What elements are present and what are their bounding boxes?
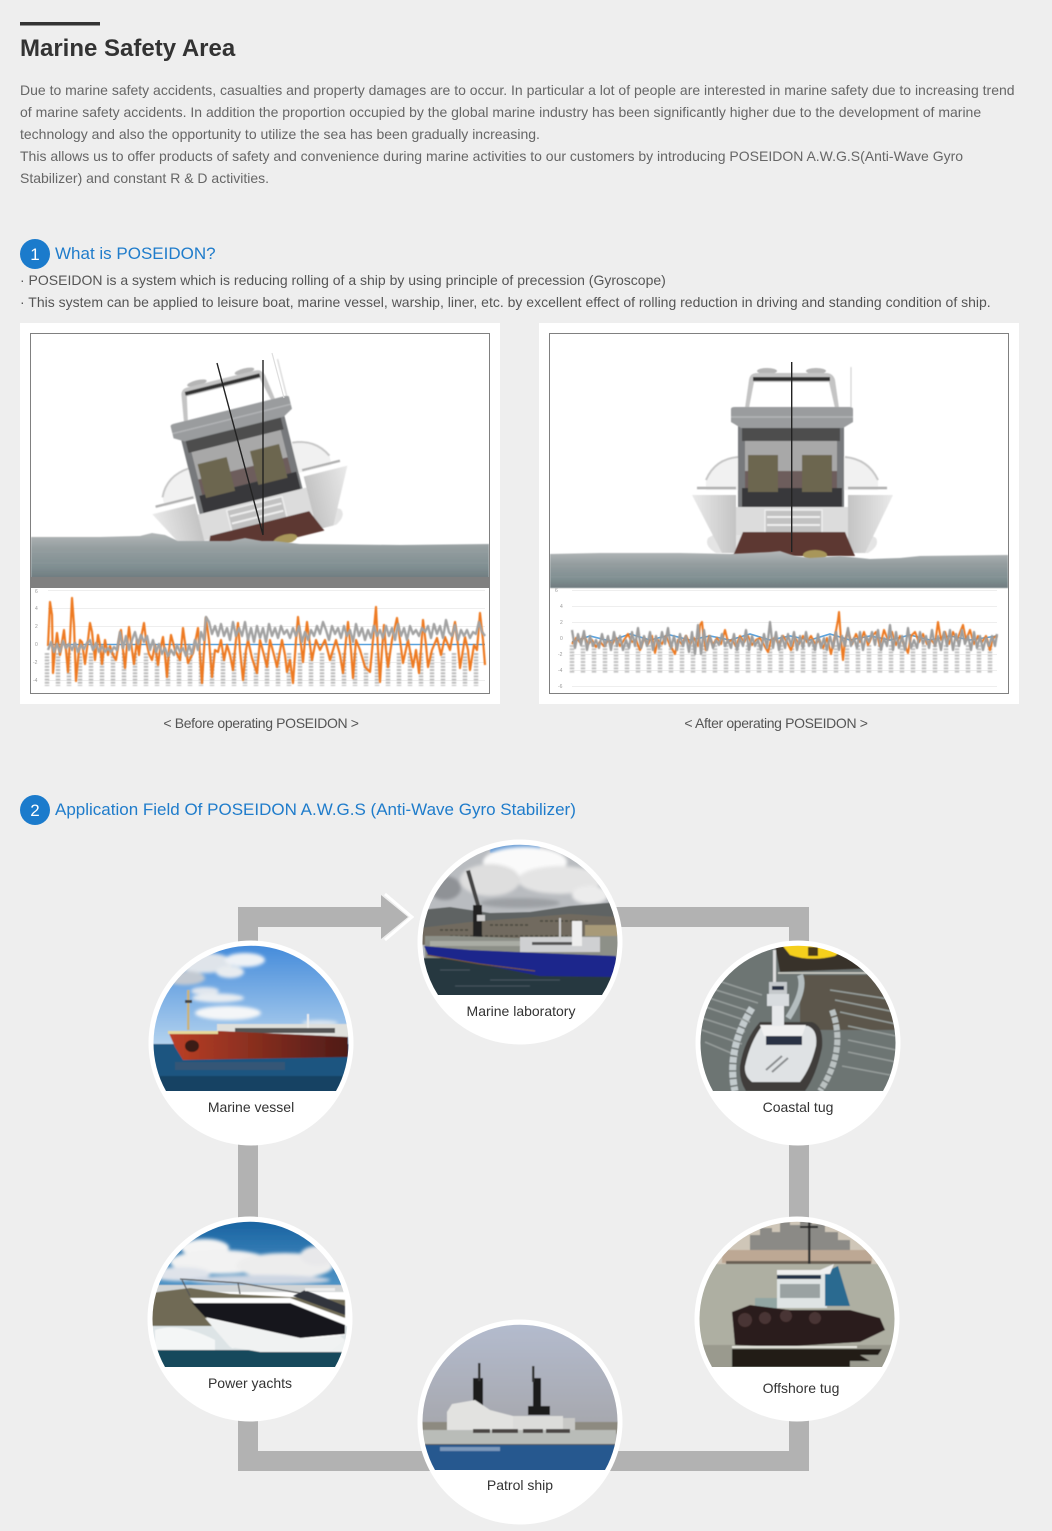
connector: application cycle path [238,907,809,1471]
section 1 bullet text [20,272,991,310]
intro text block: This allows us to offer products of safety and convenience during marine activities to our customers by introducing POSEIDON A.W.G.S(Anti-Wave Gyro [20,148,963,164]
caption: after: < After operating POSEIDON > [684,715,868,731]
chart: rolling before operation: 4 [35,606,38,612]
circle: power yachts [148,1216,355,1422]
section 2 heading: 2 [30,801,40,820]
label: Coastal tug [763,1099,833,1115]
circle: patrol ship [418,1320,623,1524]
illustration: rolling boat [31,349,489,588]
chart: rolling after operation: 6 [555,588,558,594]
section 1 heading: 1 [30,245,40,264]
circle: coastal tug [695,940,900,1146]
label: Offshore tug [763,1380,839,1396]
section 2 heading: Application Field Of POSEIDON A.W.G.S (Anti-Wave Gyro Stabilizer) [55,800,576,819]
panel: before operating POSEIDON [20,323,500,704]
intro text block: Due to marine safety accidents, casualties and property damages are to occur. In particular a lot of people are interested in marine safety due to increasing trend [20,82,1015,98]
label: Marine vessel [208,1099,294,1115]
section 1 bullet text: · POSEIDON is a system which is reducing rolling of a ship by using principle of precession (Gyroscope) [20,272,666,288]
section 1 bullet text: · This system can be applied to leisure boat, marine vessel, warship, liner, etc. by excellent effect of rolling reduction in driving and standing condition of ship. [20,294,991,310]
illustration: stabilised boat [550,362,1008,588]
label: Marine laboratory [467,1003,575,1019]
chart: rolling before operation [33,589,485,686]
chart: rolling after operation [555,588,997,690]
section 1 heading: What is POSEIDON? [55,244,216,263]
label: Power yachts [208,1375,292,1391]
chart: rolling after operation: -2 [558,652,563,658]
title [20,22,236,62]
circle: offshore tug [694,1216,900,1422]
chart: rolling before operation: 6 [35,589,38,595]
section 2 heading [20,795,576,825]
chart: rolling after operation: -4 [558,668,563,674]
panel: after operating POSEIDON [539,323,1019,704]
chart: rolling before operation: 0 [35,642,38,648]
circle: marine vessel [148,940,355,1146]
intro text block: technology and also the opportunity to utilize the sea has been gradually increasing. [20,126,540,142]
arrow: into marine laboratory [381,894,412,940]
chart: rolling before operation: 2 [35,624,38,630]
label: Patrol ship [487,1477,553,1493]
intro text block: Stabilizer) and constant R & D activities. [20,170,269,186]
chart: rolling after operation: 4 [560,604,563,610]
chart: rolling before operation: -4 [33,678,38,684]
caption: before: < Before operating POSEIDON > [163,715,359,731]
chart: rolling after operation: -6 [558,684,563,690]
title: Marine Safety Area [20,35,236,62]
intro text block: of marine safety accidents. In addition the proportion occupied by the global marine industry has been significantly higher due to the development of marine [20,104,981,120]
intro text block [20,82,1015,186]
chart: rolling before operation: -2 [33,660,38,666]
chart: rolling after operation: 0 [560,636,563,642]
circle: marine laboratory [418,840,623,1044]
section 1 heading [20,239,216,269]
chart: rolling after operation: 2 [560,620,563,626]
